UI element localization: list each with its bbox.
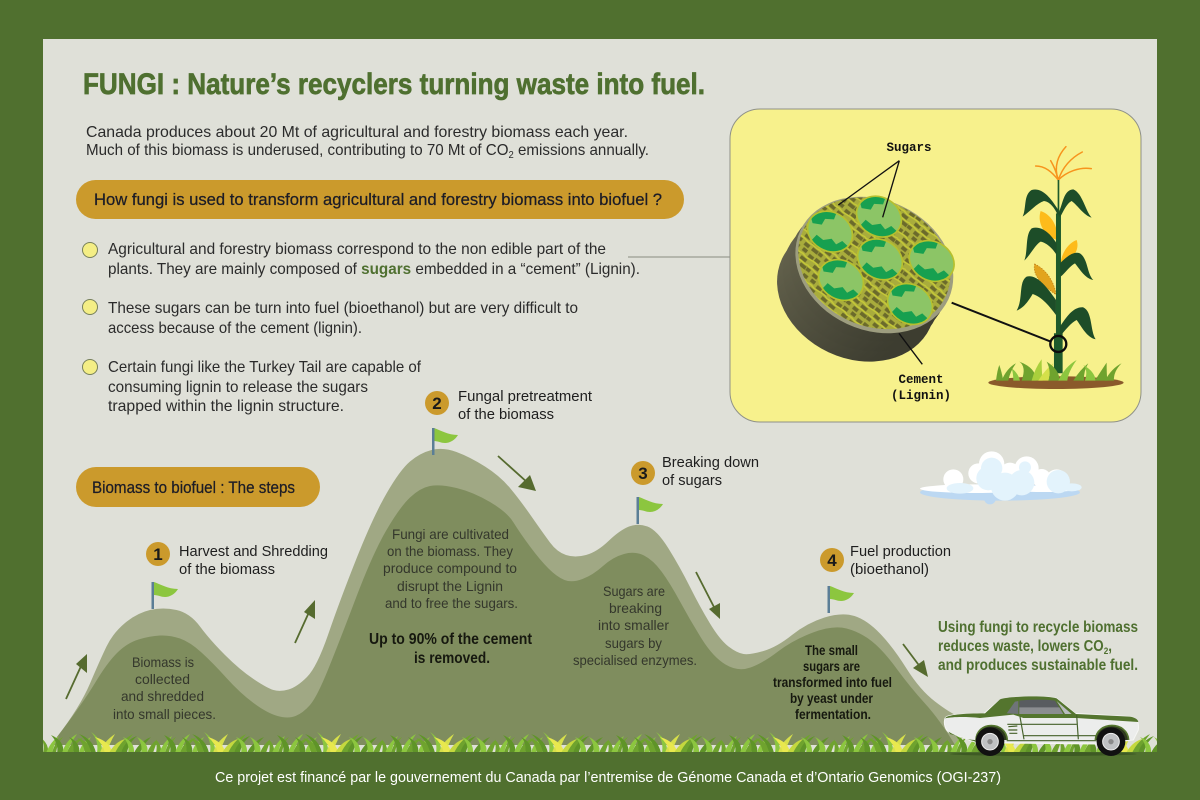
step 2: produce compound to bbox=[383, 560, 517, 576]
conclusion text: Using fungi to recycle biomass bbox=[938, 619, 1138, 636]
connector line to diagram bbox=[628, 256, 731, 258]
flag 3 bbox=[636, 497, 663, 524]
heading pill: how fungi is used bbox=[76, 180, 684, 219]
bullet 1: plants. They are mainly composed of sugars embedded in a “cement” (Lignin). bbox=[108, 261, 640, 278]
conclusion text bbox=[938, 619, 1138, 674]
step 3: 3 bbox=[638, 464, 648, 483]
ground grass bbox=[43, 732, 1157, 753]
conclusion text: 2 bbox=[1104, 646, 1108, 657]
panel: biomass diagram bbox=[730, 109, 1141, 422]
step 1: Harvest and Shredding bbox=[179, 543, 328, 560]
step 3: breaking bbox=[609, 600, 662, 616]
intro text: emissions annually. bbox=[514, 142, 649, 159]
arrows between steps bbox=[66, 456, 928, 699]
label: cement: Cement bbox=[898, 373, 944, 387]
bullet 2: These sugars can be turn into fuel (bioethanol) but are very difficult to bbox=[108, 300, 578, 317]
heading pill: steps bbox=[76, 467, 320, 507]
step 3: into smaller bbox=[598, 617, 669, 633]
step 2: 2 bbox=[432, 394, 442, 413]
icon: biomass cross-section bbox=[755, 172, 976, 387]
bullet 3 bbox=[82, 359, 422, 415]
step 3: sugars by bbox=[605, 635, 662, 651]
bullet 3: trapped within the lignin structure. bbox=[108, 398, 344, 415]
arrow 5 bbox=[903, 644, 928, 677]
step 4 bbox=[773, 543, 951, 722]
icon: car bbox=[944, 696, 1139, 756]
step 2: and to free the sugars. bbox=[385, 595, 518, 611]
step 2: Fungi are cultivated bbox=[392, 526, 509, 542]
heading pill: how fungi is used: How fungi is used to transform agricultural and forestry biomass into biofuel ? bbox=[94, 190, 662, 209]
step 1: and shredded bbox=[121, 688, 204, 704]
hills: inner bbox=[52, 485, 955, 745]
step 2: is removed. bbox=[414, 650, 490, 667]
bullet list bbox=[82, 241, 640, 415]
title: FUNGI : Nature’s recyclers turning waste into fuel. bbox=[83, 68, 705, 101]
step 4: 4 bbox=[827, 551, 837, 570]
footer: Ce projet est financé par le gouvernement du Canada par l’entremise de Génome Canada et d’Ontario Genomics (OGI-237) bbox=[215, 770, 1001, 786]
icon: corn plant bbox=[988, 147, 1124, 389]
heading pill: steps: Biomass to biofuel : The steps bbox=[92, 478, 295, 497]
icon: cloud bbox=[920, 451, 1082, 504]
step 2 bbox=[369, 388, 593, 667]
bullet 3: consuming lignin to release the sugars bbox=[108, 379, 368, 396]
step 4: by yeast under bbox=[790, 691, 874, 706]
label: sugars: Sugars bbox=[886, 141, 932, 155]
step 1 bbox=[113, 542, 328, 722]
flag 1 bbox=[152, 582, 178, 609]
step 3 bbox=[573, 454, 759, 668]
bullet 3: Certain fungi like the Turkey Tail are capable of bbox=[108, 359, 422, 376]
flag 4 bbox=[828, 586, 854, 613]
step 2: Up to 90% of the cement bbox=[369, 631, 532, 648]
step 2: disrupt the Lignin bbox=[397, 578, 503, 594]
step 2: of the biomass bbox=[458, 406, 554, 423]
intro text: 2 bbox=[509, 150, 514, 161]
arrow 4 bbox=[696, 572, 720, 619]
step 1: Biomass is bbox=[132, 654, 194, 670]
intro text: Much of this biomass is underused, contributing to 70 Mt of CO bbox=[86, 142, 532, 159]
step 1: into small pieces. bbox=[113, 706, 216, 722]
step 4: (bioethanol) bbox=[850, 561, 929, 578]
bullet 1: Agricultural and forestry biomass correspond to the non edible part of the bbox=[108, 241, 606, 258]
bullet 1 bbox=[82, 241, 640, 278]
step 3: Sugars are bbox=[603, 583, 665, 599]
step 1: 1 bbox=[153, 545, 163, 564]
step 2: Fungal pretreatment bbox=[458, 388, 593, 405]
bullet 2 bbox=[82, 300, 578, 337]
intro text: Canada produces about 20 Mt of agricultural and forestry biomass each year. bbox=[86, 124, 628, 141]
flag 2 bbox=[432, 428, 458, 455]
step 4: Fuel production bbox=[850, 543, 951, 560]
step 4: transformed into fuel bbox=[773, 675, 892, 690]
step 1: collected bbox=[135, 671, 190, 687]
step 4: fermentation. bbox=[795, 707, 871, 722]
bullet 2: access because of the cement (lignin). bbox=[108, 320, 362, 337]
conclusion text: reduces waste, lowers CO bbox=[938, 638, 1130, 655]
ground strip bbox=[0, 752, 1200, 800]
step 1: of the biomass bbox=[179, 561, 275, 578]
step 3: Breaking down bbox=[662, 454, 759, 471]
arrow 3 bbox=[498, 456, 536, 491]
leader lines bbox=[838, 161, 1050, 364]
step 3: specialised enzymes. bbox=[573, 652, 697, 668]
arrow 1 bbox=[66, 654, 87, 699]
conclusion text: and produces sustainable fuel. bbox=[938, 657, 1138, 674]
step 3: of sugars bbox=[662, 472, 722, 489]
label: cement: (Lignin) bbox=[891, 389, 951, 403]
step 2: on the biomass. They bbox=[387, 543, 513, 559]
hills: outer bbox=[52, 449, 958, 745]
arrow 2 bbox=[295, 600, 315, 643]
step 4: The small bbox=[805, 643, 858, 658]
conclusion text: , bbox=[1108, 638, 1112, 655]
step 4: sugars are bbox=[803, 659, 860, 674]
intro text bbox=[86, 124, 649, 161]
